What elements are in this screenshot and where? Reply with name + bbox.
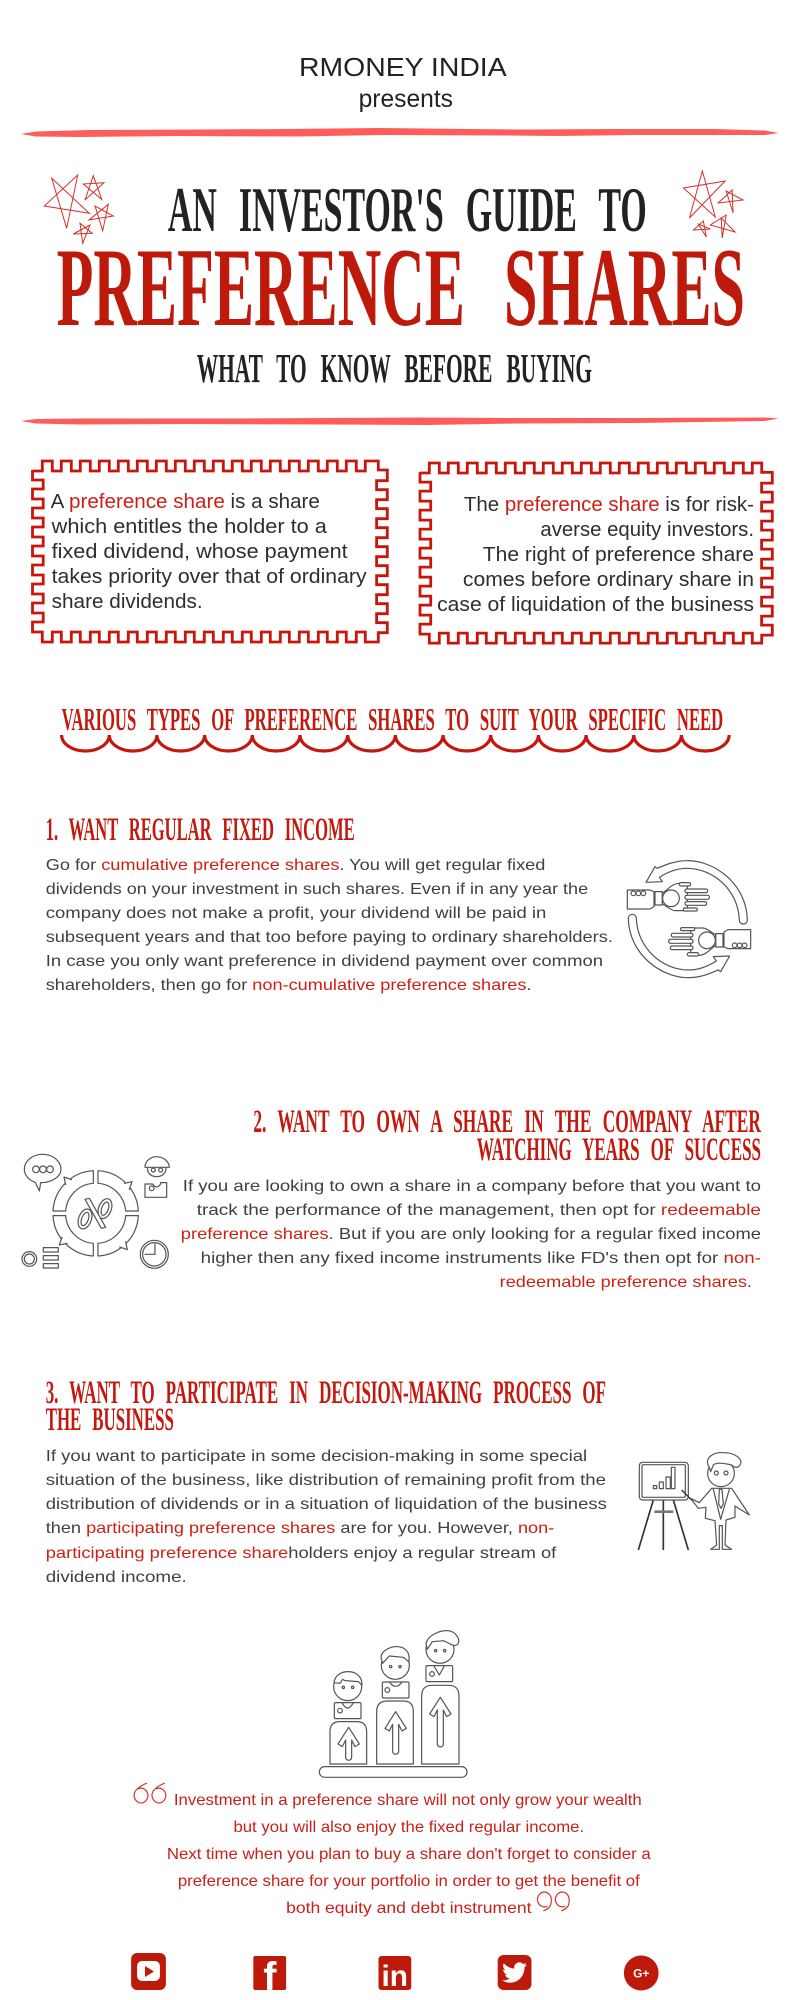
panel: section 1 regular fixed income bbox=[46, 812, 751, 994]
icon: presenter at easel bbox=[638, 1453, 749, 1550]
icon: percent ring bbox=[22, 1154, 169, 1268]
icon: google plus: G+ bbox=[633, 1966, 649, 1981]
section heading: various types bbox=[62, 702, 729, 751]
text block 1: In case you only want preference in dividend payment over common bbox=[46, 953, 603, 970]
icon: three people on rising pillars bbox=[319, 1631, 467, 1777]
heading 2 bbox=[253, 1104, 762, 1168]
text block 1: subsequent years and that too before paying to ordinary shareholders. bbox=[46, 929, 613, 946]
panel: investor box: case of liquidation of the business bbox=[437, 594, 754, 616]
icon: linkedin: in bbox=[381, 1960, 408, 1993]
text block 3: situation of the business, like distribution of remaining profit from the bbox=[46, 1472, 606, 1489]
icon: facebook bbox=[253, 1955, 286, 1999]
icon: google plus bbox=[624, 1956, 659, 1990]
social icons row bbox=[131, 1953, 659, 1999]
heading 3 bbox=[46, 1375, 606, 1438]
panel: definition box: share dividends. bbox=[52, 591, 203, 613]
panel: investor box: comes before ordinary share in bbox=[463, 569, 754, 591]
heading 1: 1. WANT REGULAR FIXED INCOME bbox=[46, 812, 355, 848]
text block 2: higher then any fixed income instruments like FD's then opt for non- bbox=[201, 1250, 761, 1267]
bottom brush stroke divider bbox=[21, 418, 779, 425]
quote text: Next time when you plan to buy a share don't forget to consider a bbox=[167, 1846, 651, 1863]
top brush stroke divider bbox=[21, 128, 779, 137]
text block 2: preference shares . But if you are only looking for a regular fixed income bbox=[181, 1226, 761, 1243]
icon: youtube bbox=[131, 1953, 166, 1990]
quote text: both equity and debt instrument bbox=[286, 1900, 532, 1917]
panel: section 3 decision making bbox=[46, 1375, 749, 1586]
text block 3: dividend income. bbox=[46, 1569, 187, 1586]
presenter heading bbox=[299, 54, 507, 113]
text block 3: participating preference share holders enjoy a regular stream of bbox=[46, 1545, 557, 1562]
text block 1: shareholders, then go for non-cumulative preference shares . bbox=[46, 977, 531, 994]
icon: closing quote marks bbox=[537, 1892, 569, 1911]
text block 2: redeemable preference shares . bbox=[500, 1274, 752, 1291]
panel: investor box bbox=[420, 463, 772, 643]
text block 3 bbox=[46, 1448, 612, 1586]
panel: definition box: takes priority over that of ordinary bbox=[52, 566, 367, 588]
text block 1: company does not make a profit, your dividend will be paid in bbox=[46, 905, 546, 922]
icon: exchanging hands bbox=[627, 861, 751, 978]
text block 2 bbox=[181, 1178, 761, 1291]
text block 1: dividends on your investment in such shares. Even if in any year the bbox=[46, 881, 588, 898]
text block 3: distribution of dividends or in a situation of liquidation of the business, bbox=[46, 1496, 612, 1513]
title bbox=[57, 174, 745, 391]
icon: stars right bbox=[683, 171, 743, 238]
panel: section 2 own a share bbox=[22, 1104, 762, 1291]
panel: investor box: averse equity investors. bbox=[540, 519, 754, 541]
quote text: preference share for your portfolio in order to get the benefit of bbox=[178, 1873, 640, 1890]
quote text bbox=[167, 1792, 651, 1917]
text block 2: If you are looking to own a share in a company before that you want to bbox=[183, 1178, 761, 1195]
panel: definition box: which entitles the holder to a bbox=[51, 516, 328, 538]
presenter heading: RMONEY INDIA bbox=[299, 54, 507, 82]
text block 2: track the performance of the management, then opt for redeemable bbox=[197, 1202, 761, 1219]
icon: stars left bbox=[44, 175, 113, 243]
panel: definition box bbox=[32, 461, 387, 642]
presenter heading: presents bbox=[359, 85, 453, 113]
callout: closing quote bbox=[134, 1783, 651, 1917]
text block 3: If you want to participate in some decision-making in some special bbox=[46, 1448, 587, 1465]
text block 3: then participating preference shares are for you. However, non- bbox=[46, 1520, 554, 1537]
quote text: but you will also enjoy the fixed regular income. bbox=[233, 1819, 584, 1836]
panel: investor box: The right of preference share bbox=[483, 544, 754, 566]
heading 3: THE BUSINESS bbox=[46, 1402, 174, 1438]
icon: facebook: f bbox=[263, 1955, 277, 1999]
icon: twitter bbox=[498, 1955, 531, 1990]
text block 1 bbox=[46, 857, 613, 994]
icon: opening quote marks bbox=[134, 1783, 166, 1803]
panel: definition box: A preference share is a share bbox=[51, 491, 320, 513]
quote text: Investment in a preference share will not only grow your wealth bbox=[174, 1792, 642, 1809]
text block 1: Go for cumulative preference shares . You will get regular fixed bbox=[46, 857, 545, 874]
panel: investor box: The preference share is for risk- bbox=[464, 494, 754, 516]
panel: definition box: fixed dividend, whose payment bbox=[52, 541, 348, 563]
